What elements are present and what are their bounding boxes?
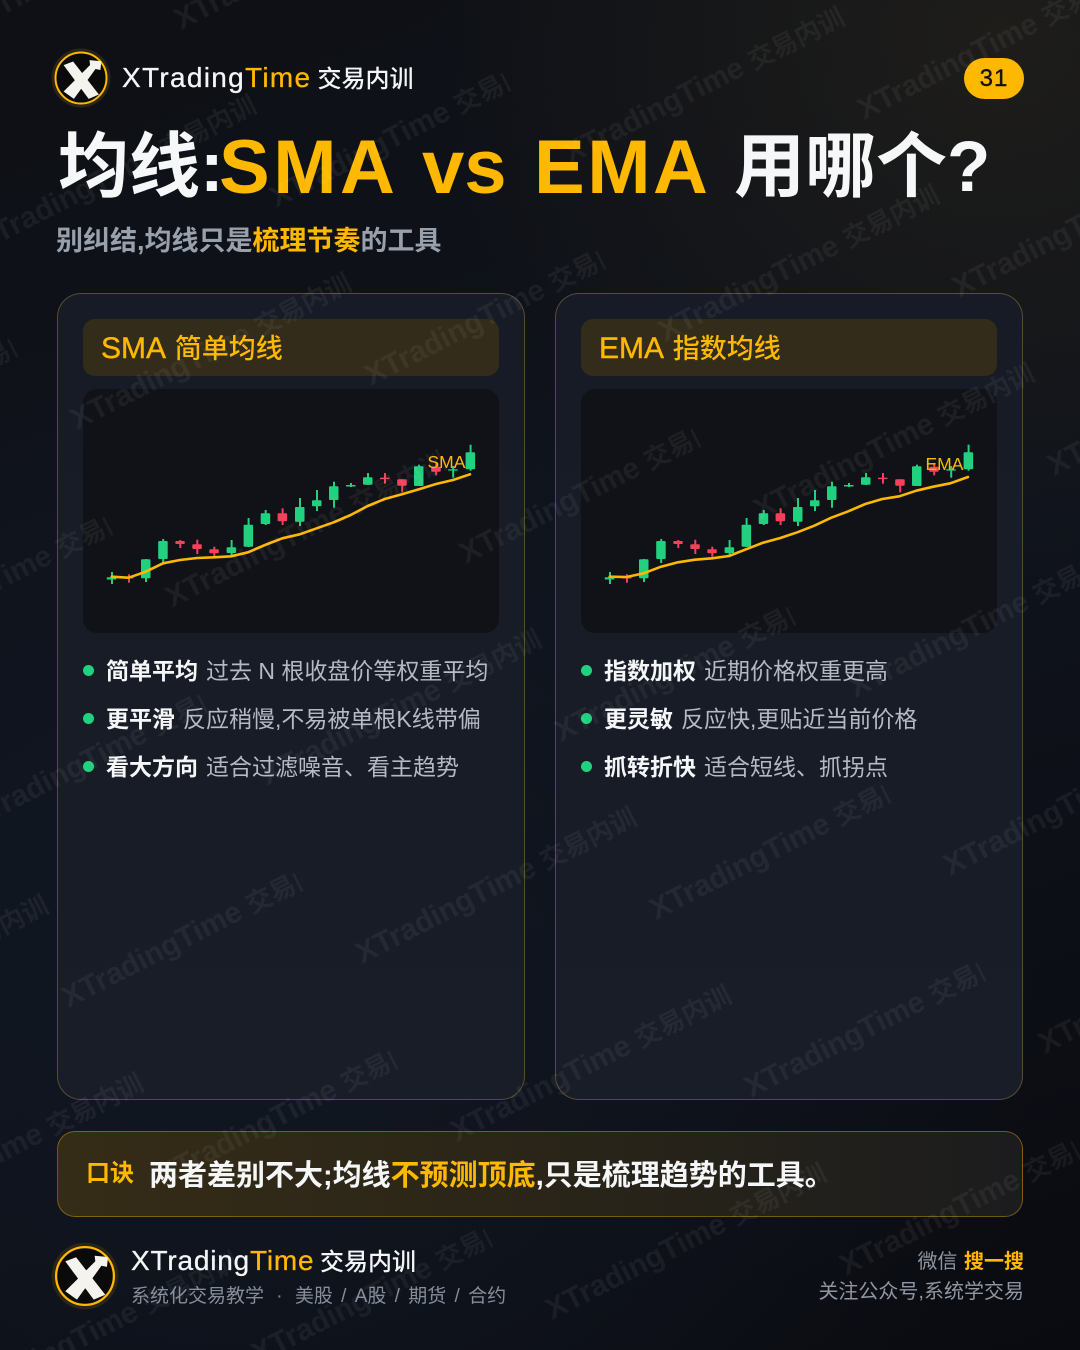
watermark: XTradingTime 交易内训 xyxy=(454,400,746,570)
watermark: XTradingTime 交易内训 xyxy=(739,934,1031,1104)
watermark: XTradingTime 交易内训 xyxy=(558,0,850,170)
EMA heading xyxy=(581,319,997,376)
watermark: XTradingTime 交易内训 xyxy=(653,178,945,348)
EMA bullet 2: 更灵敏 反应快,更贴近当前价格 xyxy=(604,706,917,732)
title: EMA xyxy=(534,125,710,210)
SMA bullet 3: 看大方向 适合过滤噪音、看主趋势 xyxy=(106,754,459,780)
SMA candlestick chart: SMA xyxy=(428,452,466,472)
brand name: header: XTradingTime 交易内训 xyxy=(122,62,413,93)
title: 用哪个? xyxy=(734,128,990,207)
watermark: XTradingTime 交易内训 xyxy=(65,266,357,436)
watermark: XTradingTime 交易内训 xyxy=(160,444,452,614)
footer tagline: 系统化交易教学 · 美股 / A股 / 期货 / 合约 xyxy=(131,1286,506,1307)
SMA bullet 2: 更平滑 反应稍慢,不易被单根K线带偏 xyxy=(106,706,481,732)
page badge: 31 xyxy=(980,65,1008,92)
logo: footer xyxy=(52,1242,118,1310)
panel: SMA xyxy=(57,293,525,1100)
EMA candlestick chart: EMA xyxy=(926,454,964,474)
watermark: XTradingTime 交易内训 xyxy=(350,800,642,970)
subtitle: 别纠结,均线只是梳理节奏的工具 xyxy=(56,226,442,256)
callout: mnemonic xyxy=(57,1131,1023,1217)
watermark: XTradingTime 交易内训 xyxy=(255,622,547,792)
watermark: XTradingTime 交易内训 xyxy=(151,1022,443,1192)
SMA heading: SMA 简单均线 xyxy=(101,332,283,365)
page badge xyxy=(964,58,1024,99)
watermark: XTradingTime 交易内训 xyxy=(359,222,651,392)
footer call to action: 微信 搜一搜 xyxy=(917,1251,1024,1273)
title xyxy=(58,125,990,210)
SMA heading xyxy=(83,319,499,376)
EMA bullet 1: 指数加权 近期价格权重更高 xyxy=(604,658,888,684)
SMA bullet 1: 简单平均 过去 N 根收盘价等权重平均 xyxy=(106,658,488,684)
SMA candlestick chart xyxy=(83,389,499,633)
watermark: XTradingTime 交易内训 xyxy=(540,1156,832,1326)
footer call to action: 关注公众号,系统学交易 xyxy=(818,1281,1024,1303)
watermark: XTradingTime 交易内训 xyxy=(644,756,936,926)
watermark: XTradingTime 交易内训 xyxy=(445,978,737,1148)
footer call to action xyxy=(818,1250,1024,1303)
watermark: XTradingTime 交易内训 xyxy=(56,844,348,1014)
title: 均线: xyxy=(58,128,224,207)
title: vs xyxy=(422,125,507,210)
logo: header xyxy=(52,48,110,108)
EMA candlestick chart xyxy=(581,389,997,633)
EMA heading: EMA 指数均线 xyxy=(599,332,781,365)
callout label: 口诀 xyxy=(86,1160,134,1187)
watermark: XTradingTime 交易内训 xyxy=(549,578,841,748)
title: SMA xyxy=(219,125,398,210)
callout text: 两者差别不大;均线不预测顶底,只是梳理趋势的工具。 xyxy=(149,1160,834,1192)
watermark: XTradingTime 交易内训 xyxy=(264,44,556,214)
EMA bullet 3: 抓转折快 适合短线、抓拐点 xyxy=(604,754,888,780)
panel: EMA xyxy=(555,293,1023,1100)
brand name: footer: XTradingTime 交易内训 xyxy=(131,1245,416,1276)
watermark: XTradingTime 交易内训 xyxy=(748,356,1040,526)
